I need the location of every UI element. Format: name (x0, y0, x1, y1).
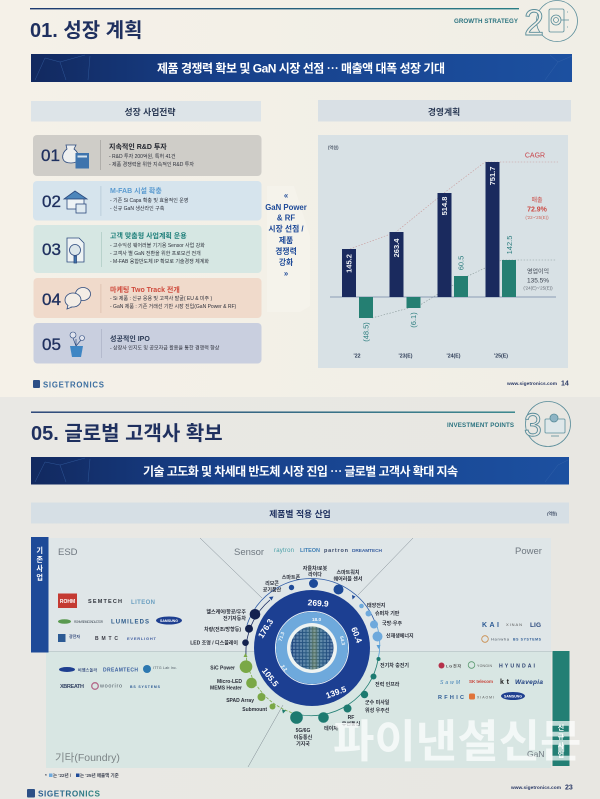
CAGR labels (523, 152, 553, 290)
customer logos: GaN: XIAOMI (477, 696, 494, 700)
labels: foundry applications: SiC Power (210, 666, 235, 672)
card 03: customer-tailored business plan (34, 225, 262, 273)
values: revenue (344, 167, 497, 273)
icon: factory house (64, 191, 87, 213)
bars: revenue (342, 162, 500, 297)
banner: headline slide 23: 기술 고도화 및 차세대 반도체 시장 진입 ⋯ 글로벌 고객사 확대 지속 (143, 464, 458, 478)
icon: money bag and calculator (63, 145, 89, 168)
tab: existing business (31, 537, 48, 652)
ring values: 105.5 (260, 666, 281, 689)
inner ring values: 54.3 (338, 635, 346, 646)
ring values: 60.4 (349, 625, 365, 645)
footer logo slide 23: SIGETRONICS (38, 790, 101, 798)
labels: GaN applications: 이동통신 (294, 734, 313, 741)
values: operating profit: 60.5 (456, 256, 466, 270)
icon: number 3 with monitor: 3 (524, 407, 542, 443)
values: revenue: 514.8 (440, 197, 449, 215)
customer logos: sensor: partron (324, 548, 349, 554)
labels: ESD applications: 헬스케어/항공/우주 (206, 608, 246, 616)
customer logos: foundry (59, 665, 177, 690)
labels: sensor applications: 자율차/로봇 (303, 565, 328, 572)
card 01: R&D investment: 지속적인 R&D 투자 (109, 142, 167, 151)
customer logos: foundry: 비엠스놀라 (78, 666, 97, 672)
customer logos: ESD (58, 594, 182, 642)
icon: speech bubbles (65, 288, 90, 309)
axis (330, 296, 556, 298)
values: revenue: 145.2 (344, 254, 354, 273)
customer logos: power: LIG (530, 622, 541, 629)
customer logos: ESD: 광전자 (69, 633, 80, 639)
section header: applied industries: (억원) (547, 510, 558, 516)
tab: new business: 신 (558, 723, 564, 732)
banner: headline slide 14 (31, 54, 572, 82)
ring values (256, 597, 365, 700)
ring values: 269.9 (307, 597, 329, 609)
labels: sensor applications (263, 565, 363, 594)
section header: management plan (318, 100, 571, 122)
customer logos: GaN: HYUNDAI (499, 664, 536, 670)
section header: applied industries: 제품별 적용 산업 (269, 508, 331, 519)
labels: foundry applications: Submount (242, 707, 267, 713)
labels: GaN applications: 군수 미사일 (365, 699, 390, 706)
labels: ESD applications: 전기자동차 (223, 615, 246, 622)
customer logos: foundry: wooriro (99, 684, 122, 690)
labels: GaN applications: 위성 우주선 (365, 707, 390, 714)
customer logos: foundry: BS SYSTEMS (130, 685, 161, 689)
labels: power applications: 신재생에너지 (386, 632, 414, 640)
card 01: R&D investment: - R&D 투자 200억원, 특허 41건 (109, 153, 176, 160)
customer logos: sensor: DREAMTECH (352, 548, 383, 554)
chart: market donut (246, 579, 380, 716)
trend line: operating profit (372, 260, 556, 318)
labels: foundry applications (210, 666, 267, 713)
customer logos: GaN (438, 662, 543, 701)
top rule of slide 14 (30, 8, 519, 9)
label: growth strategy: GROWTH STRATEGY (454, 18, 519, 25)
icon: number 2 with tablet target: 2 (524, 2, 544, 43)
callout: GaN Power and RF arrow: 제품 (279, 235, 293, 245)
card 04: marketing two track: - Si 제품 : 신규 응용 및 고객사 발굴( EU & 미주 ) (110, 295, 213, 302)
page background: lower slide (0, 397, 600, 799)
customer logos: ESD: ROHM (60, 599, 75, 605)
customer logos: GaN: SAMSUNG (504, 694, 522, 698)
callout: GaN Power and RF arrow: 경쟁력 (275, 246, 297, 256)
customer logos: ESD: BMTC (95, 636, 118, 642)
panel: bar chart: (억원) (328, 144, 339, 151)
footer url and page 23: 23 (565, 784, 573, 792)
labels: sensor applications: 공기품산 (263, 586, 282, 594)
top rule of slide 23 (31, 412, 515, 413)
labels: GaN applications: 테이저 (324, 725, 338, 732)
customer logos: foundry: DREAMTECH (103, 668, 138, 674)
title: 05 global customers: 05. 글로벌 고객사 확보 (31, 422, 223, 445)
dots: GaN segment (290, 657, 380, 724)
title: 01 growth plan: 01. 성장 계획 (30, 19, 143, 42)
customer logos: power (482, 622, 542, 642)
footnote: 는 '25년 매출액 기준 (80, 772, 119, 779)
labels: GaN applications (294, 662, 409, 748)
icon: document with magnifier (67, 238, 84, 263)
tab: existing business: 존 (36, 555, 43, 564)
footer url and page 23: www.sigetronics.com (510, 785, 561, 791)
footer url and page 14: 14 (561, 380, 569, 388)
CAGR labels: CAGR (525, 152, 545, 160)
inner ring values: 2.2 (279, 664, 288, 673)
bars: operating profit (359, 260, 516, 318)
card 03: customer-tailored business plan: - 고수익성 웨어러블 기기용 Sensor 사업 강화 (110, 242, 205, 249)
card 04: marketing two track: 04 (42, 290, 61, 309)
customer logos: ESD: SAMSUNG (160, 619, 178, 623)
icon: number 2 with tablet target (524, 0, 578, 43)
CAGR labels: ('24(E)~'25(E)) (523, 286, 553, 290)
customer logos: power: Hanwha (491, 636, 510, 642)
card 01: R&D investment (33, 135, 262, 176)
CAGR labels: 매출 (531, 196, 543, 204)
card 01: R&D investment: 01 (41, 146, 60, 165)
card 05: successful IPO: - 상장사 인지도 및 공모자금 활용을 통한 경쟁력 향상 (110, 344, 220, 352)
dots: foundry segment (240, 660, 276, 710)
tab: existing business: 기 (36, 546, 43, 555)
labels: sensor applications: 스마트폰 (282, 574, 301, 581)
card 02: M-FAB expansion: - 기존 Si Capa 확충 및 효율적인 운영 (110, 197, 188, 204)
customer logos: power: BS SYSTEMS (513, 638, 542, 642)
labels: foundry applications: SPAD Array (226, 698, 254, 704)
labels: ESD applications (190, 608, 246, 646)
customer logos: foundry: ITTG Lab Inc. (153, 666, 177, 670)
footnote: 는 '22년 / (53, 772, 72, 778)
callout: GaN Power and RF arrow: « (284, 191, 288, 200)
customer logos: sensor: LITEON (300, 548, 320, 554)
arrows on connector ring (244, 595, 380, 714)
card 03: customer-tailored business plan: 03 (42, 240, 61, 259)
labels: GaN applications: 5G/6G (296, 728, 310, 734)
banner: headline slide 23 (31, 457, 569, 484)
card 05: successful IPO: 05 (42, 335, 61, 354)
inner ring values (278, 617, 346, 673)
tab: new business: 규 (558, 733, 565, 741)
inner ring values: 18.0 (312, 617, 321, 623)
labels: sensor applications: 스마트워치 (336, 569, 360, 576)
labels: GaN applications: 무선통신 (342, 720, 361, 728)
card 04: marketing two track: - GaN 제품 : 기존 거래선 기반 시장 진입(GaN Power & RF) (110, 303, 237, 310)
section header: growth business strategy (31, 101, 261, 122)
footnote: * (45, 773, 47, 778)
footer logo slide 14: SIGETRONICS (43, 380, 104, 390)
card 04: marketing two track (34, 278, 262, 318)
customer logos: GaN: YONGIN (477, 664, 492, 668)
tab: existing business: 사 (36, 564, 43, 573)
quadrant label Power: Power (515, 546, 542, 557)
customer logos: sensor: raytron (274, 548, 294, 554)
section header: management plan: 경영계획 (428, 106, 460, 117)
dots: ESD segment (242, 609, 260, 646)
wafer (290, 626, 334, 670)
card 05: successful IPO: 성공적인 IPO (110, 334, 150, 343)
customer logos: power: KAI (482, 622, 499, 629)
panel: bar chart (318, 135, 568, 368)
footnote (45, 772, 119, 779)
labels: GaN applications: 전기차 충전기 (380, 662, 409, 669)
values: revenue: 263.4 (392, 238, 401, 257)
labels: power applications: 태양전지 (367, 602, 386, 609)
tab: existing business: 업 (36, 573, 43, 582)
labels: ESD applications: LED 조명 / 디스플레이 (190, 640, 238, 646)
card 03: customer-tailored business plan: - M-FAB 융합반도체 IP 확보로 기술경쟁 체계화 (110, 258, 209, 265)
customer logos: sensor (274, 548, 383, 554)
customer logos: GaN: SawM (440, 680, 461, 686)
values: operating profit (362, 236, 514, 342)
section header: growth business strategy: 성장 사업전략 (124, 106, 176, 117)
CAGR labels: 135.5% (527, 278, 549, 284)
labels: GaN applications: RF (348, 715, 354, 721)
values: operating profit: 142.5 (505, 236, 514, 254)
x axis labels: '23(E) (399, 354, 413, 360)
page background: upper slide (0, 0, 600, 397)
card 02: M-FAB expansion: M-FAB 시설 확충 (110, 186, 162, 195)
callout: GaN Power and RF arrow: 시장 선점 / (268, 224, 304, 234)
callout: GaN Power and RF arrow: & RF (277, 214, 295, 222)
footer url and page 14 (506, 380, 569, 388)
label: investment points: INVESTMENT POINTS (447, 422, 514, 429)
CAGR labels: 72.9% (527, 206, 548, 214)
labels: GaN applications: 기지국 (296, 740, 310, 748)
values: revenue: 751.7 (488, 167, 497, 185)
x axis labels (353, 354, 508, 360)
labels: power applications: 슈퍼차 기판 (375, 610, 400, 617)
customer logos: ESD: EVERLIGHT (127, 636, 157, 641)
dots: solar and space segment (359, 604, 382, 642)
card 01: R&D investment: - 제품 경쟁력을 위한 지속적인 R&D 투자 (109, 161, 194, 168)
quadrant label GaN: GaN (527, 749, 544, 759)
x axis labels: '22 (353, 354, 361, 360)
labels: sensor applications: 리모콘 (265, 580, 279, 587)
ring values: 176.3 (256, 617, 275, 640)
quadrant label Sensor: Sensor (234, 547, 264, 558)
CAGR labels: 영업이익 (527, 268, 549, 276)
customer logos: GaN: Wavepia (515, 679, 543, 686)
panel: market map (46, 538, 552, 768)
callout: GaN Power and RF arrow (265, 186, 310, 312)
card 02: M-FAB expansion: - 신규 GaN 생산라인 구축 (110, 205, 165, 212)
customer logos: GaN: SK telecom (469, 679, 493, 684)
customer logos: GaN: RFHIC (438, 695, 464, 701)
customer logos: ESD: LITEON (131, 600, 155, 606)
icon: number 3 with monitor (524, 402, 570, 446)
tab: new business: 업 (558, 750, 564, 759)
tab: new business (552, 651, 570, 766)
watermark: 파이낸셜신문 (333, 716, 581, 767)
labels: sensor applications: 웨어러블 센서 (334, 576, 363, 582)
x axis labels: '24(E) (447, 354, 461, 360)
card 02: M-FAB expansion: 02 (42, 192, 61, 211)
quadrant label ESD: ESD (58, 547, 78, 558)
x axis labels: '25(E) (494, 354, 508, 360)
labels: foundry applications: Micro-LED (217, 679, 242, 685)
inner ring values: 71.3 (278, 631, 286, 642)
banner: headline slide 14: 제품 경쟁력 확보 및 GaN 시장 선점 ⋯ 매출액 대폭 성장 기대 (157, 60, 445, 76)
quadrant label Foundry: 기타(Foundry) (55, 752, 120, 764)
labels: power applications: 국방·우주 (382, 620, 402, 627)
section header: applied industries (31, 502, 569, 524)
card 02: M-FAB expansion (33, 181, 262, 220)
labels: sensor applications: 라이다 (308, 571, 322, 578)
icon: money plant pot (70, 332, 84, 357)
customer logos: power: XINAN (506, 622, 522, 627)
values: operating profit: (48.5) (362, 322, 370, 342)
customer logos: GaN: LG전자 (446, 662, 461, 668)
footer url and page 23 (510, 784, 573, 792)
customer logos: foundry: XBREATH (60, 684, 84, 690)
footer url and page 14: www.sigetronics.com (506, 381, 557, 387)
card 03: customer-tailored business plan: - 고객사 별 GaN 전환을 위한 프로모션 전개 (110, 250, 201, 257)
outer connector ring (246, 579, 380, 716)
customer logos: GaN: kt (500, 679, 510, 686)
card 05: successful IPO (34, 323, 262, 364)
labels: foundry applications: MEMS Heater (210, 686, 242, 692)
customer logos: ESD: ROHM SEMICONDUCTOR (74, 620, 104, 624)
labels: power applications (367, 602, 414, 640)
CAGR labels: ('22~'25(E)) (525, 215, 549, 220)
callout: GaN Power and RF arrow: 강화 (279, 257, 293, 267)
ring values: 139.5 (324, 684, 348, 700)
tab: new business: 사 (558, 741, 565, 750)
callout: GaN Power and RF arrow: » (284, 269, 288, 278)
dots: sensor segment (289, 579, 344, 594)
labels: ESD applications: 차량(전조/방향등) (204, 626, 241, 633)
trend line: revenue CAGR (350, 162, 558, 249)
labels: GaN applications: 전력 인프라 (375, 681, 400, 688)
callout: GaN Power and RF arrow: GaN Power (265, 203, 307, 212)
values: operating profit: (6.1) (409, 312, 418, 328)
card 04: marketing two track: 마케팅 Two Track 전개 (110, 285, 180, 294)
card 03: customer-tailored business plan: 고객 맞춤형 사업계획 운용 (110, 231, 187, 240)
customer logos: ESD: LUMILEDS (111, 620, 149, 626)
customer logos: ESD: SEMTECH (88, 599, 122, 605)
